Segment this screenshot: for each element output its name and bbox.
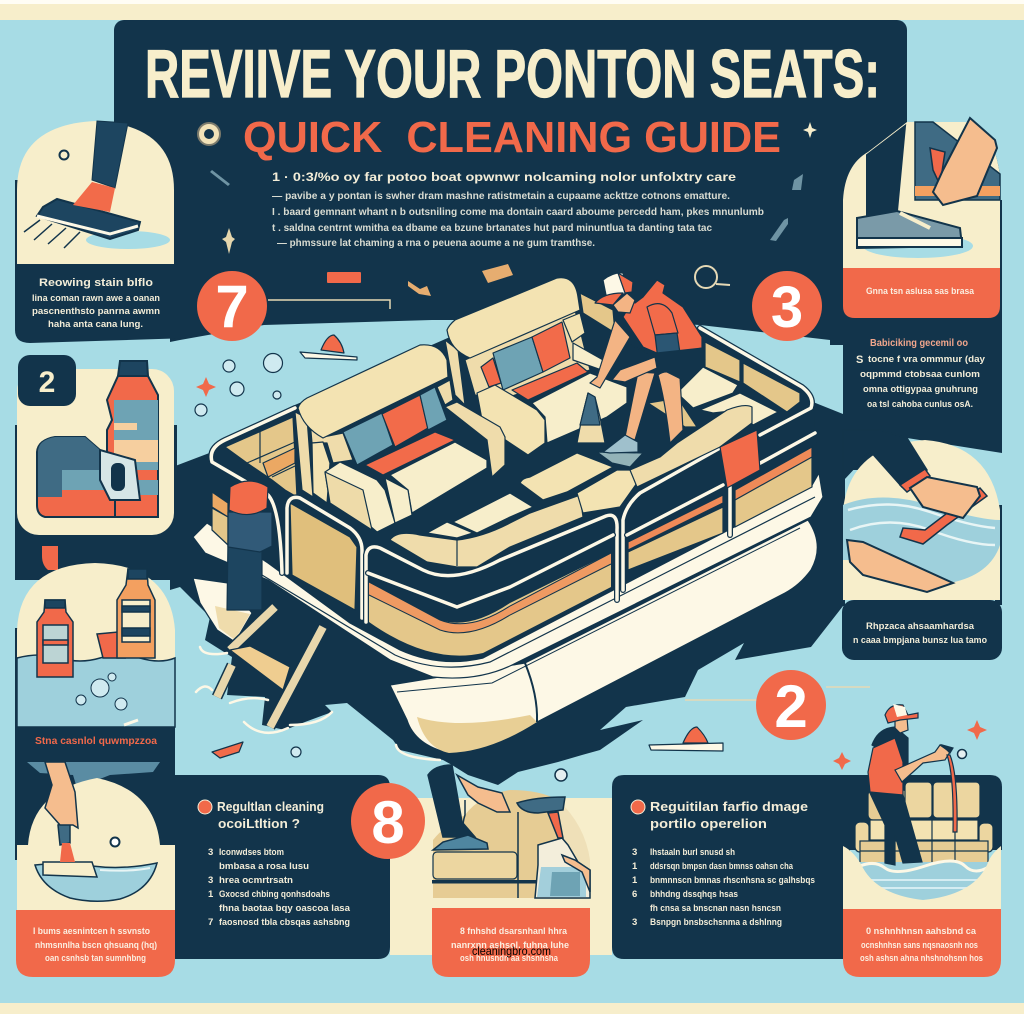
heading bbox=[217, 799, 324, 831]
pontoon boat illustration bbox=[193, 273, 823, 760]
list: fhna baotaa bqy oascoa lasa bbox=[219, 903, 351, 914]
number tag bbox=[18, 355, 76, 406]
panel: left step 3 bottles in water bbox=[15, 563, 175, 760]
panel: bottom left text bbox=[15, 755, 390, 959]
icon: bottle bbox=[107, 361, 158, 517]
caption: I bums aesnintcen h ssvnsto bbox=[33, 926, 150, 937]
list bbox=[208, 847, 351, 928]
panel: right step hand in water bbox=[830, 430, 1002, 660]
intro text list: — phmssure lat chaming a rna o peuena aoume a ne gum tramthse. bbox=[277, 238, 595, 249]
list: bmbasa a rosa lusu bbox=[219, 861, 309, 872]
icon: sleeve and hand with tool bbox=[843, 430, 987, 592]
intro text list: — pavibe a y pontan is swher dram mashne ratistmetain a cupaame ackttze cotnons ematture. bbox=[272, 191, 730, 202]
list: 3 bbox=[632, 847, 637, 858]
number badge 3: 3 bbox=[771, 275, 803, 340]
water ripples bbox=[196, 647, 440, 760]
caption bbox=[853, 621, 987, 646]
rear rails bbox=[211, 328, 812, 573]
panel: bottom center cream backing bbox=[390, 798, 612, 955]
list: Gxocsd chbing qonhsdoahs bbox=[219, 889, 330, 900]
caption: nanrxnn ashsol. fuhna luhe bbox=[451, 940, 569, 951]
intro text list: t . saldna centrnt wmitha ea dbame ea bzune brtanates hut pard minuntlua ta danting tata tac bbox=[272, 223, 712, 234]
icon: worker bbox=[868, 704, 957, 865]
person cleaning seat bbox=[577, 273, 705, 467]
deck rim bbox=[193, 473, 823, 678]
head and cap bbox=[595, 273, 635, 313]
icon: cream bowl surround bbox=[843, 846, 1001, 909]
sparkle coral bbox=[833, 752, 851, 770]
intro text list: I . baard gemnant whant n b outsniling come ma dontain caard aboume percedd ham, pkes mnunlumb bbox=[272, 207, 764, 218]
panel: left step 2 cleaning bottles bbox=[15, 355, 177, 580]
caption bbox=[860, 926, 983, 964]
caption: pascnenthsto panrna awmn bbox=[32, 306, 160, 317]
panel: right text block: oa tsl cahoba cunlus osA. bbox=[867, 399, 973, 410]
list bbox=[632, 847, 815, 928]
panel: bottom center step bbox=[428, 765, 590, 977]
coral number: 2 bbox=[866, 123, 878, 148]
list: 1 bbox=[632, 875, 638, 886]
list: 7 bbox=[208, 917, 213, 928]
panel: bottom right step with person spraying couch bbox=[843, 704, 1001, 977]
seat: rear captain chair bbox=[445, 278, 627, 455]
panel: right step scrub and shoe bbox=[830, 100, 1002, 345]
list: ddsrsqn bmpsn dasn bmnss oahsn cha bbox=[650, 861, 794, 872]
number badge 7 bbox=[197, 271, 390, 341]
icon: wiping hand bbox=[915, 118, 1000, 205]
coral bullet bbox=[198, 800, 212, 814]
number badge 8: 8 bbox=[371, 789, 405, 856]
caption: 0 nshnhhnsn aahsbnd ca bbox=[866, 926, 977, 937]
torso and vest bbox=[615, 280, 705, 382]
icon: couch and spray bottle bbox=[432, 790, 590, 899]
brush tool bbox=[577, 393, 605, 443]
caption: Reowing stain blflo bbox=[39, 277, 153, 289]
railing frames bbox=[287, 433, 815, 622]
bubble bbox=[555, 769, 567, 781]
icon: leg and hand bbox=[428, 765, 510, 850]
rear bench bbox=[648, 367, 738, 427]
caption bbox=[32, 277, 160, 330]
heading: Regultlan cleaning bbox=[217, 799, 324, 814]
icon: bubbles bbox=[76, 673, 138, 725]
list: hrea ocmrtrsatn bbox=[219, 875, 293, 886]
panel: bottom left step bbox=[16, 762, 175, 977]
shoe and mat bbox=[597, 435, 643, 467]
icon: jug bbox=[37, 437, 140, 517]
list: Bsnpgn bnsbschsnma a dshlnng bbox=[650, 917, 782, 928]
icon: water bowl bbox=[855, 862, 992, 905]
icon: spray bottle bbox=[517, 797, 590, 898]
icon: target badge bbox=[198, 123, 220, 145]
number badge 7: 7 bbox=[215, 273, 249, 340]
seat: front captain chair bbox=[295, 345, 505, 532]
list: bhhdng dssqhqs hsas bbox=[650, 889, 738, 900]
icon: tall bottle bbox=[97, 569, 155, 658]
heading bbox=[650, 799, 808, 831]
list: 1 bbox=[208, 889, 214, 900]
panel: left step 1 bbox=[15, 121, 190, 343]
panel: right text block: Babiciking gecemil oo bbox=[870, 337, 968, 349]
list: Ihstaaln burl snusd sh bbox=[650, 847, 735, 858]
panel: right text block bbox=[830, 318, 1002, 470]
list: Iconwdses btom bbox=[219, 847, 284, 858]
list: 1 bbox=[632, 861, 638, 872]
caption bbox=[451, 926, 569, 964]
list: 3 bbox=[208, 847, 213, 858]
caption: Rhpzaca ahsaamhardsa bbox=[866, 621, 975, 632]
icon: hand with squeegee in water bbox=[35, 762, 157, 901]
icon: sparkles and tools bbox=[210, 122, 817, 254]
legs bbox=[625, 372, 683, 443]
icon: boot on scrub brush bbox=[24, 121, 170, 249]
caption: n caaa bmpjana bunsz lua tamo bbox=[853, 635, 987, 646]
caption: osh hnusndn aa shsnhsha bbox=[460, 953, 559, 964]
front hull section one bbox=[369, 553, 611, 656]
list: faosnosd tbla cbsqas ashsbng bbox=[219, 917, 350, 928]
caption: Gnna tsn aslusa sas brasa bbox=[866, 286, 975, 297]
caption bbox=[33, 926, 157, 964]
front hull section three bbox=[735, 447, 812, 527]
number badge 2: 2 bbox=[774, 673, 808, 740]
arms bbox=[590, 320, 657, 388]
intro text list: 1 · 0:3/%o oy far potoo boat opwnwr nolcaming nolor unfolxtry care bbox=[272, 170, 736, 184]
dark boat body bbox=[212, 280, 820, 677]
ladder bbox=[217, 607, 323, 727]
left hull sections bbox=[212, 492, 357, 610]
watermark: cleaningbro.com bbox=[472, 944, 551, 958]
list: 3 bbox=[208, 875, 213, 886]
caption: ocnshnhsn sans nqsnaosnh nos bbox=[861, 940, 978, 951]
list: 6 bbox=[632, 889, 637, 900]
panel: right text block: omna ottigypaa gnuhrung bbox=[863, 384, 978, 395]
subtitle: QUICK CLEANING GUIDE bbox=[243, 113, 781, 162]
boat shadow and dark water backdrop bbox=[170, 250, 843, 785]
floating coral items bbox=[196, 335, 723, 758]
seat: lounge bench bbox=[390, 406, 752, 567]
caption: nhmsnnlha bscn qhsuanq (hq) bbox=[35, 940, 157, 951]
caption: Stna casnlol quwmpzzoa bbox=[35, 736, 157, 747]
sparkle near bubble bbox=[958, 720, 987, 758]
panel: bottom right text bbox=[612, 775, 1002, 959]
list: 3 bbox=[632, 917, 637, 928]
icon: sofa bbox=[855, 782, 993, 863]
number badge 3 bbox=[752, 271, 822, 341]
cleaning brush on rail bbox=[227, 481, 272, 610]
coral bullet bbox=[631, 800, 645, 814]
orange towel bbox=[720, 430, 760, 488]
number badge 8 bbox=[351, 783, 425, 859]
outboard motor bbox=[193, 578, 252, 642]
heading: Reguitilan farfio dmage bbox=[650, 799, 808, 814]
intro text list bbox=[272, 170, 764, 249]
caption: 8 fnhshd dsarsnhanl hhra bbox=[460, 926, 568, 937]
panel: right text block: oqpmmd ctobsaa cunlom bbox=[860, 369, 980, 380]
panel: right text block: tocne f vra ommmur (day bbox=[868, 354, 986, 365]
pontoon float bbox=[390, 520, 817, 753]
heading: ocoiLtltion ? bbox=[218, 816, 300, 831]
front hull section two bbox=[628, 495, 723, 570]
bubbles bbox=[195, 354, 301, 757]
icon: water waves bbox=[843, 498, 1000, 583]
coral tab bbox=[42, 546, 58, 570]
caption: osh ashsn ahna nhshnohsnn hos bbox=[860, 953, 983, 964]
number tag: 2 bbox=[39, 366, 55, 399]
caption: haha anta cana lung. bbox=[48, 319, 143, 330]
floating items bbox=[327, 264, 730, 296]
caption: oan csnhsb tan sumnhbng bbox=[45, 953, 146, 964]
rear wall panels bbox=[225, 293, 800, 497]
heading: portilo operelion bbox=[650, 816, 767, 831]
caption: lina coman rawn awe a oanan bbox=[32, 293, 160, 304]
list: fh cnsa sa bnscnan nasn hsncsn bbox=[650, 903, 781, 914]
panel: right text block: S bbox=[856, 354, 863, 366]
number badge 2 bbox=[685, 670, 870, 740]
icon: small bottle bbox=[37, 600, 73, 677]
list: bnmnnscn bmnas rhscnhsna sc galhsbqs bbox=[650, 875, 815, 886]
icon: shoe on water bbox=[857, 126, 973, 258]
title panel bbox=[114, 20, 907, 320]
